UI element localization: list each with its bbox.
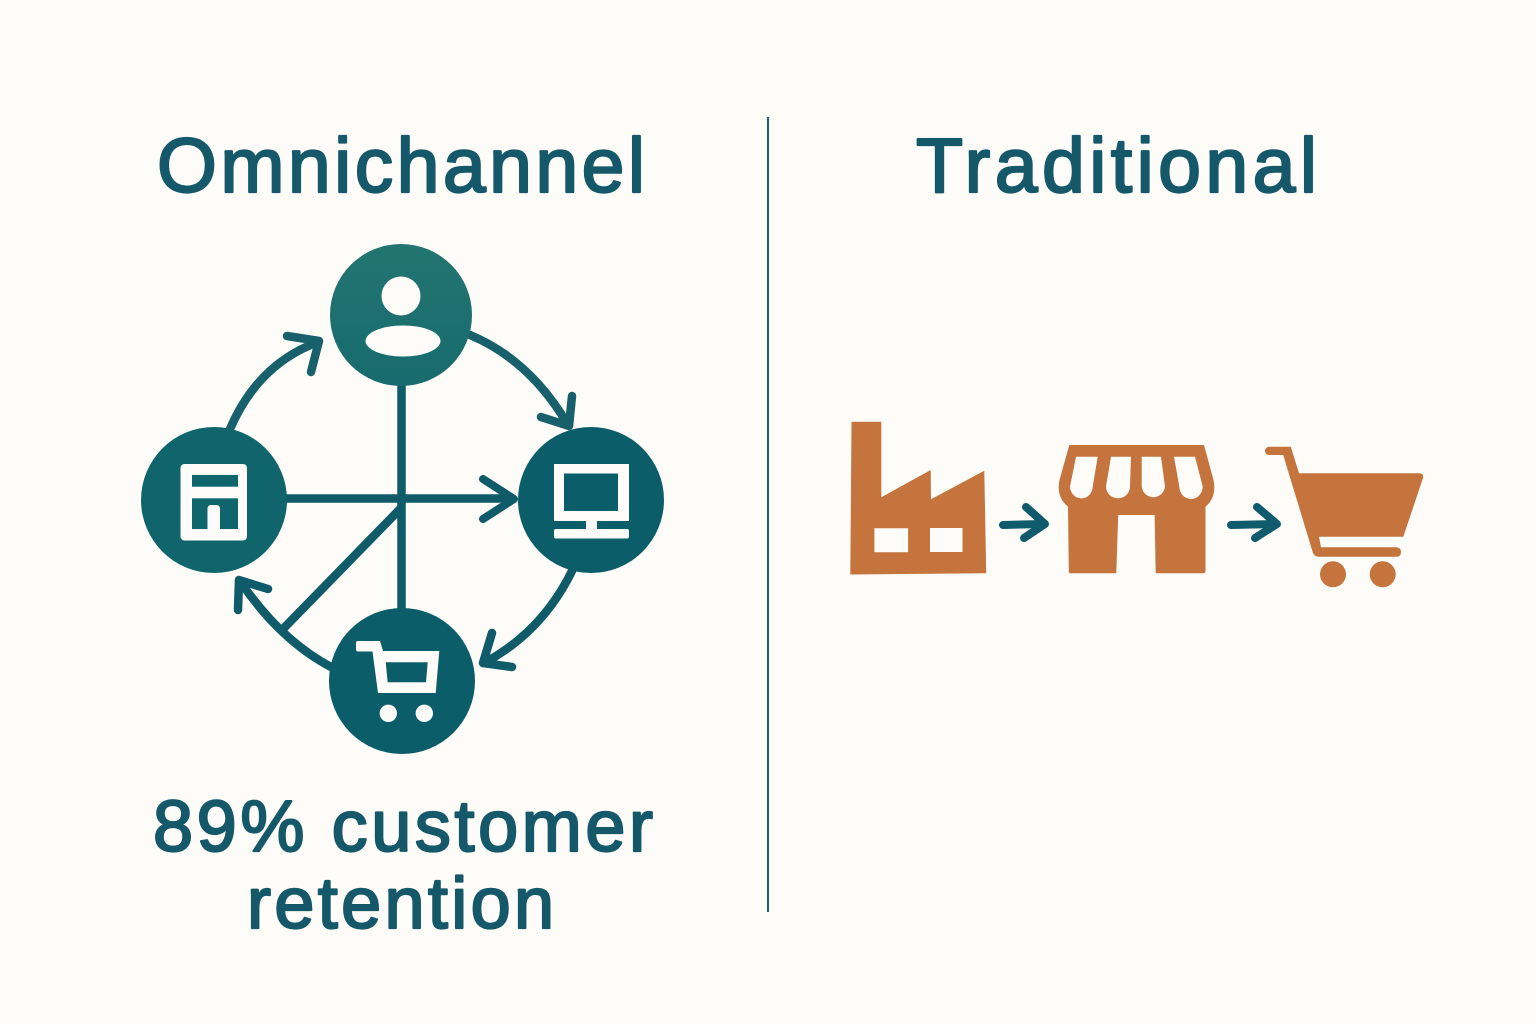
arrow: device to cart xyxy=(483,571,572,667)
traditional linear flow xyxy=(850,422,1423,587)
stat: 89% customer retention xyxy=(153,787,653,944)
icon: store xyxy=(1059,445,1214,573)
arrow: centre line to device xyxy=(483,479,514,519)
arrow: store to cart xyxy=(1231,507,1277,538)
icon: shopping cart xyxy=(1265,447,1423,587)
omnichannel hub diagram xyxy=(141,244,664,754)
node: customer xyxy=(330,244,472,386)
stat: 89% customer retention: retention xyxy=(247,864,554,944)
heading: Omnichannel: Omnichannel xyxy=(157,123,645,209)
heading: Traditional: Traditional xyxy=(916,123,1317,209)
arrow: store to customer xyxy=(230,336,319,429)
arrow: cart to store xyxy=(238,580,331,667)
node: cart xyxy=(329,608,475,754)
node: store xyxy=(141,427,287,573)
node: device xyxy=(518,427,664,573)
stat: 89% customer retention: 89% customer xyxy=(153,787,653,867)
connector lines through the centre xyxy=(283,385,512,629)
arrow: factory to store xyxy=(1003,507,1045,538)
icon: factory xyxy=(850,422,986,574)
arrow: customer to device xyxy=(470,335,572,426)
